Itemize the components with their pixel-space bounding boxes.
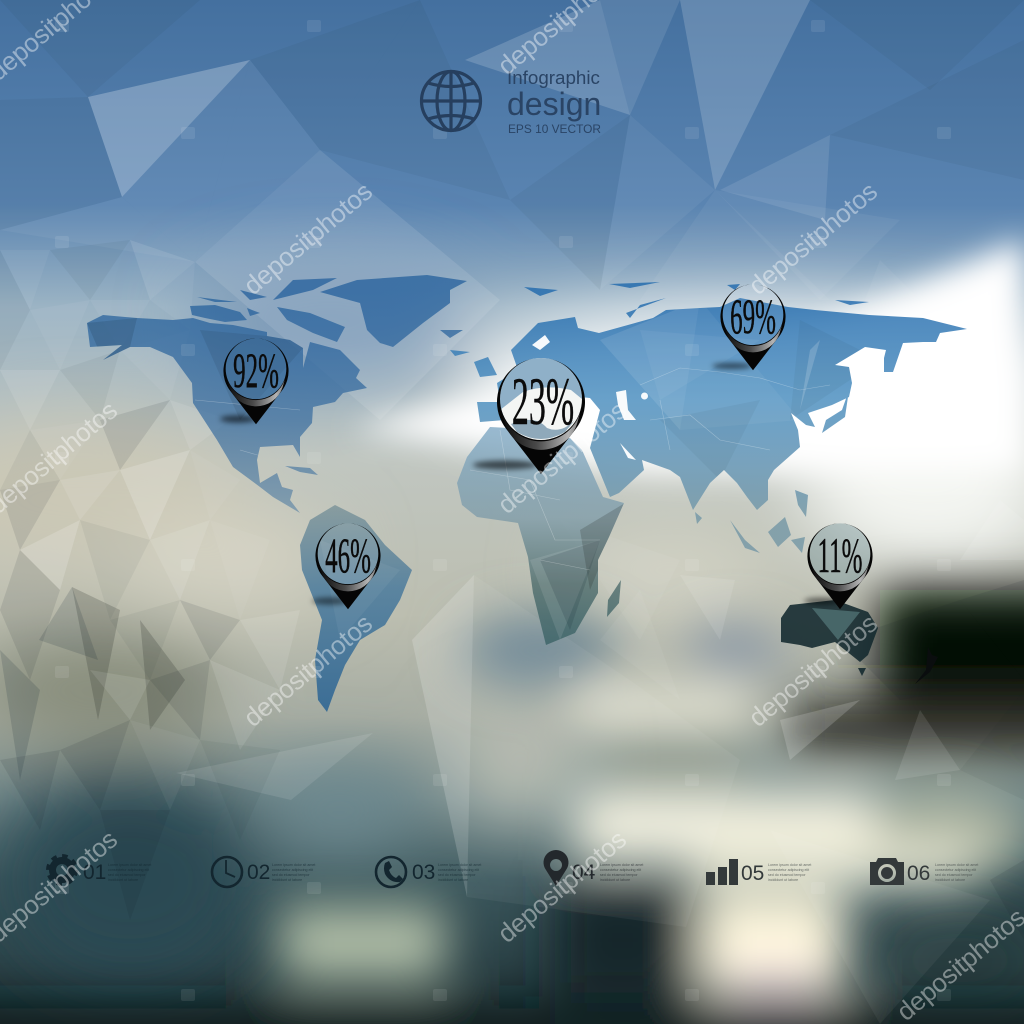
map polygon facets and borders xyxy=(87,300,880,640)
item 04: location pin: Lorem ipsum dolor sit amet xyxy=(600,863,643,867)
icon: globe xyxy=(422,72,480,131)
item 03: phone: Lorem ipsum dolor sit amet xyxy=(438,863,481,867)
world map xyxy=(87,275,967,712)
item 01: gear xyxy=(48,856,151,884)
Eurasia and islands xyxy=(450,282,967,553)
title text: Infographic xyxy=(507,67,600,88)
item 06: camera: Lorem ipsum dolor sit amet xyxy=(935,863,978,867)
item 05: bar chart: consectetur adipiscing elit xyxy=(768,868,809,872)
pin: 46%: 46% xyxy=(325,528,371,583)
item 02: clock xyxy=(212,857,315,887)
pin: 23% xyxy=(473,358,585,474)
pin: 11% xyxy=(804,523,873,609)
item 06: camera: sed do eiusmod tempor xyxy=(935,873,973,877)
South America xyxy=(300,505,412,712)
item 02: clock: consectetur adipiscing elit xyxy=(272,868,313,872)
Australia and New Zealand xyxy=(781,600,938,684)
watermarks: depositphotos xyxy=(743,176,883,301)
item 03: phone: sed do eiusmod tempor xyxy=(438,873,476,877)
item 05: bar chart: sed do eiusmod tempor xyxy=(768,873,806,877)
North America and Greenland xyxy=(87,275,467,513)
item 03: phone: consectetur adipiscing elit xyxy=(438,868,479,872)
item 02: clock: Lorem ipsum dolor sit amet xyxy=(272,863,315,867)
item 06: camera: 06 xyxy=(907,862,930,885)
item 03: phone: 03 xyxy=(412,861,435,884)
item 01: gear: consectetur adipiscing elit xyxy=(108,868,149,872)
item 04: location pin: incididunt ut labore xyxy=(600,878,630,882)
watermarks: depositphotos xyxy=(492,824,632,949)
watermarks: depositphotos xyxy=(492,395,632,520)
pin: 69%: 69% xyxy=(730,289,776,344)
header: globe logo and title xyxy=(422,67,601,136)
pin: 92% xyxy=(220,338,289,424)
pin: 69% xyxy=(712,284,786,370)
item 04: location pin: consectetur adipiscing elit xyxy=(600,868,641,872)
item 05: bar chart: Lorem ipsum dolor sit amet xyxy=(768,863,811,867)
watermarks: depositphotos xyxy=(743,608,883,733)
pin: 11%: 11% xyxy=(818,528,862,583)
title text: EPS 10 VECTOR xyxy=(508,122,601,136)
pin: 46% xyxy=(312,523,381,609)
item 02: clock: sed do eiusmod tempor xyxy=(272,873,310,877)
item 01: gear: sed do eiusmod tempor xyxy=(108,873,146,877)
item 03: phone: incididunt ut labore xyxy=(438,878,468,882)
item 04: location pin xyxy=(544,850,643,886)
item 05: bar chart: 05 xyxy=(741,862,764,885)
item 06: camera: consectetur adipiscing elit xyxy=(935,868,976,872)
item 02: clock: incididunt ut labore xyxy=(272,878,302,882)
item 04: location pin: 04 xyxy=(572,861,596,884)
pin: 92%: 92% xyxy=(233,343,279,398)
item 06: camera xyxy=(870,858,978,885)
title text xyxy=(507,67,601,136)
Africa and Madagascar xyxy=(457,427,624,645)
watermarks: depositphotos xyxy=(238,176,378,301)
item 05: bar chart xyxy=(706,859,811,885)
watermarks: depositphotos xyxy=(238,608,378,733)
item 04: location pin: sed do eiusmod tempor xyxy=(600,873,638,877)
title text: design xyxy=(507,86,601,122)
item 03: phone xyxy=(376,857,481,887)
item 05: bar chart: incididunt ut labore xyxy=(768,878,798,882)
inland seas xyxy=(532,335,648,460)
item 06: camera: incididunt ut labore xyxy=(935,878,965,882)
item 02: clock: 02 xyxy=(247,861,270,884)
item 01: gear: 01 xyxy=(83,861,106,884)
item 01: gear: Lorem ipsum dolor sit amet xyxy=(108,863,151,867)
pin: 23%: 23% xyxy=(512,363,574,439)
item 01: gear: incididunt ut labore xyxy=(108,878,138,882)
